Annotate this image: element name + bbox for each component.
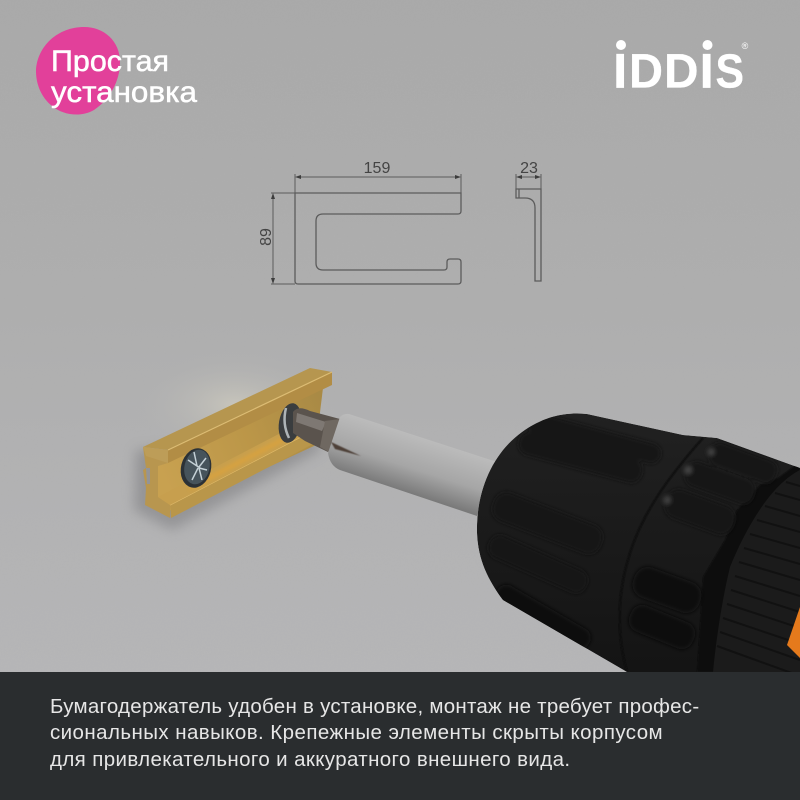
caption line 3: для привлекательного и аккуратного внешнего вида. <box>50 748 570 771</box>
chuck collar seam <box>620 438 703 672</box>
holder front view <box>295 193 461 284</box>
channel back wall <box>157 388 323 512</box>
width dimension: 159 <box>364 160 390 177</box>
collar right edge <box>697 462 800 672</box>
heading: Простая <box>51 45 169 78</box>
lower lip <box>170 429 316 518</box>
depth dimension: 23 <box>520 160 538 177</box>
logo: ® <box>742 41 749 51</box>
heading <box>51 45 198 109</box>
end face <box>143 447 170 518</box>
height dimension: 89 <box>258 228 275 246</box>
far screw <box>276 401 304 445</box>
logo: D <box>664 46 698 98</box>
logo: I <box>700 46 713 98</box>
logo: I <box>614 46 627 98</box>
orange drill body <box>787 607 800 658</box>
bit reflection <box>331 442 361 456</box>
collar grooves <box>625 440 780 653</box>
height dimension <box>258 193 295 284</box>
near screw <box>177 445 215 491</box>
knurled ring <box>713 470 800 676</box>
caption line 2: сиональных навыков. Крепежные элементы скрыты корпусом <box>50 721 663 744</box>
hex bit <box>293 408 340 452</box>
drill chuck <box>477 410 800 676</box>
holder side view <box>516 189 541 281</box>
width dimension <box>295 160 461 193</box>
heading: установка <box>51 76 198 109</box>
caption panel <box>0 672 800 800</box>
dimension drawing <box>258 160 541 284</box>
brass bracket <box>134 368 332 530</box>
caption line 1: Бумагодержатель удобен в установке, монтаж не требует профес- <box>50 695 699 718</box>
chuck ridges <box>496 416 660 648</box>
screwdriver bit <box>293 408 497 516</box>
depth dimension <box>516 160 541 189</box>
upper rail <box>143 368 332 450</box>
bracket shadow <box>134 440 320 530</box>
logo <box>614 40 749 98</box>
logo: S <box>716 46 744 98</box>
pink blob <box>36 27 120 115</box>
metal sleeve <box>328 414 497 516</box>
chuck body <box>477 414 800 672</box>
channel reflection <box>190 437 288 488</box>
logo: D <box>629 46 663 98</box>
